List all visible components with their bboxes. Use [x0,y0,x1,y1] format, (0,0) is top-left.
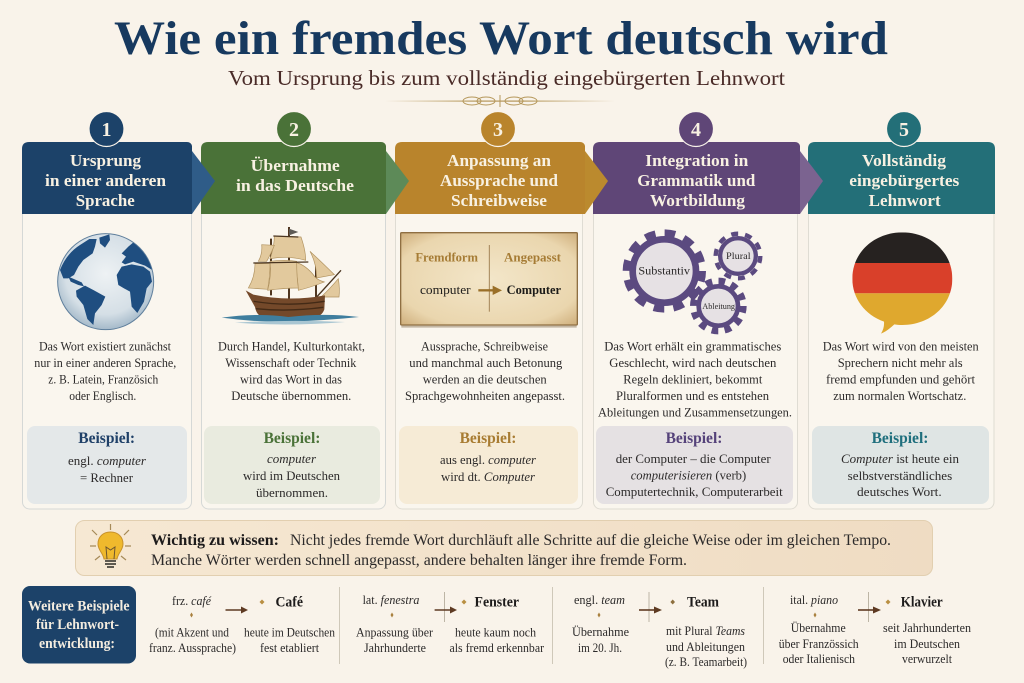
header 2: in das Deutsche [236,176,354,195]
number badge 3 [480,112,516,146]
example: Team: engl. team [574,593,625,607]
panel: further examples label: entwicklung: [39,636,115,652]
number badge 4 [678,112,714,146]
example 5: Computer ist heute ein [841,451,959,466]
example: Klavier: Klavier [901,594,943,610]
panel: step 4 [593,112,800,509]
example: Klavier: im Deutschen [894,637,961,651]
icon: gears: Ableitung [702,302,735,311]
icon: light bulb [90,524,131,567]
header 4 [593,142,800,214]
header 1: Sprache [76,191,135,210]
example: Fenster: Jahrhunderte [364,641,426,655]
example: Fenster: Fenster [474,594,520,610]
number badge 5: 5 [899,119,909,141]
icon: speech bubble in German flag colours [850,230,957,335]
number badge 2 [276,112,312,146]
number badge 4: 4 [691,119,701,141]
icon: gears: Plural [726,252,751,262]
header 2 [201,142,386,214]
card 3 [396,200,582,509]
icon: parchment comparison: Angepasst [504,250,562,264]
example: Team: (z. B. Teamarbeit) [665,655,747,669]
number badge 5 [886,112,922,146]
header 5: Vollständig [862,151,947,170]
panel: step 2 [201,112,386,509]
example: Fenster: als fremd erkennbar [450,641,545,655]
example 2: übernommen. [256,485,328,500]
description 5 [823,338,979,403]
example 1: engl. computer [68,453,147,468]
panel: further examples label: Weitere Beispiele [28,598,130,614]
header 1: in einer anderen [45,171,167,190]
example 4 [596,426,793,504]
description 5: fremd empfunden und gehört [826,372,975,386]
example 3: Beispiel: [460,430,516,447]
title: Wie ein fremdes Wort deutsch wird [114,12,888,65]
description 3 [405,338,565,403]
icon: parchment comparison: Computer [507,282,561,297]
example: Fenster: lat. fenestra [363,593,419,607]
description 1 [34,338,176,403]
header 1 [22,142,192,214]
description 3: Sprachgewohnheiten angepasst. [405,388,565,403]
example: Café: fest etabliert [260,641,319,655]
subtitle: Vom Ursprung bis zum vollständig eingebürgerten Lehnwort [228,66,785,90]
callout text: Nicht jedes fremde Wort durchläuft alle Schritte auf die gleiche Weise oder im gleichen Tempo. [290,532,891,549]
description 1: Das Wort existiert zunächst [39,338,171,354]
header 4: Wortbildung [650,191,745,210]
example: Klavier: oder Italienisch [783,652,856,666]
header 5: eingebürgertes [849,171,960,190]
card 1 [22,200,192,509]
example: Team: Übernahme [572,625,629,639]
description 1: oder Englisch. [69,388,136,403]
example: Klavier: verwurzelt [902,652,952,666]
header 3 [395,142,585,214]
example 5: deutsches Wort. [857,484,942,499]
header 2: Übernahme [251,156,340,175]
number badge 1: 1 [102,119,112,141]
icon: parchment comparison [401,233,577,327]
header 3: Schreibweise [451,191,547,210]
description 3: werden an die deutschen [423,372,547,386]
example 3 [399,426,578,504]
icon: gears: Substantiv [638,265,690,277]
example: Café: Café [276,594,304,610]
description 4: Regeln dekliniert, bekommt [623,372,763,386]
example: Café: franz. Aussprache) [149,641,236,655]
example: Fenster: Anpassung über [356,626,434,640]
example: Fenster: heute kaum noch [455,626,537,640]
example 1: = Rechner [80,470,134,485]
header 5: Lehnwort [869,191,941,210]
example 3: aus engl. computer [440,452,537,467]
example: Klavier: Übernahme [791,621,846,635]
icon: sailing ship [222,227,359,325]
panel: step 1 [22,112,192,509]
panel: step 3 [395,112,585,509]
example 1: Beispiel: [78,430,135,447]
description 5: Das Wort wird von den meisten [823,338,979,354]
card 4 [594,200,798,509]
description 1: z. B. Latein, Französich [48,372,159,386]
example: Team: Team [687,594,719,610]
example 5: Beispiel: [872,430,928,447]
description 4: Ableitungen und Zusammensetzungen. [598,404,792,420]
number badge 3: 3 [493,119,503,141]
panel: further examples label: für Lehnwort- [36,617,119,633]
card 2 [202,200,386,509]
description 4 [598,338,792,420]
description 4: Pluralformen und es entstehen [616,388,769,403]
example 1 [27,426,187,504]
example: Klavier: seit Jahrhunderten [883,621,972,635]
example 2 [204,426,380,504]
example: Café: (mit Akzent und [155,626,230,640]
description 5: Sprechern nicht mehr als [838,355,963,370]
description 2: wird das Wort in das [240,372,342,386]
icon: gears [626,233,760,331]
description 2: Wissenschaft oder Technik [225,355,357,370]
example: Café [149,594,336,655]
description 5: zum normalen Wortschatz. [833,388,966,403]
description 4: Geschlecht, wird nach deutschen [609,355,777,370]
example: Klavier: über Französsich [779,637,859,651]
example 2: wird im Deutschen [243,468,340,483]
icon: parchment comparison: computer [420,282,471,297]
description 4: Das Wort erhält ein grammatisches [604,338,781,354]
number badge 1 [89,112,124,146]
example 3: wird dt. Computer [441,469,536,484]
description 2 [218,338,365,403]
example: Café: heute im Deutschen [244,626,336,640]
example 2: computer [267,451,317,466]
example: Team [572,592,747,669]
example 4: Beispiel: [666,430,722,447]
callout: good to know [76,520,932,576]
example: Fenster [356,592,545,655]
header 1: Ursprung [70,151,141,170]
example: Café: frz. café [172,594,211,608]
header 4: Integration in [645,151,749,170]
card 5 [808,200,994,509]
example 2: Beispiel: [264,430,320,447]
description 2: Deutsche übernommen. [231,388,351,403]
number badge 2: 2 [289,119,299,141]
callout text [151,532,891,569]
description 2: Durch Handel, Kulturkontakt, [218,338,365,354]
arrow: step 3 to 4 [585,151,608,214]
example: Team: im 20. Jh. [578,641,622,655]
icon: globe [58,234,155,330]
arrow: step 4 to 5 [800,151,823,214]
example 4: computerisieren (verb) [631,468,746,482]
description 1: nur in einer anderen Sprache, [34,355,176,370]
icon: parchment comparison: Fremdform [415,250,479,264]
description 3: Aussprache, Schreibweise [421,338,548,354]
arrow: step 2 to 3 [386,151,409,214]
callout text: Manche Wörter werden schnell angepasst, andere behalten länger ihre fremde Form. [151,552,687,569]
arrow: step 1 to 2 [192,151,215,214]
example 4: Computertechnik, Computerarbeit [606,484,783,499]
example 4: der Computer – die Computer [616,451,771,466]
header 4: Grammatik und [637,171,756,190]
example 5: selbstverständliches [848,468,952,483]
panel: step 5 [808,112,995,509]
example 5 [812,426,989,504]
header 3: Aussprache und [440,171,559,190]
callout text: Wichtig zu wissen: [151,532,279,549]
ornament divider [385,95,615,107]
description 3: und manchmal auch Betonung [409,355,563,370]
example: Team: und Ableitungen [666,640,746,654]
example: Klavier: ital. piano [790,593,838,607]
header 3: Anpassung an [447,151,552,170]
example: Klavier [779,592,972,666]
header 5 [808,142,995,214]
panel: further examples label [22,586,136,664]
example: Team: mit Plural Teams [666,624,745,638]
